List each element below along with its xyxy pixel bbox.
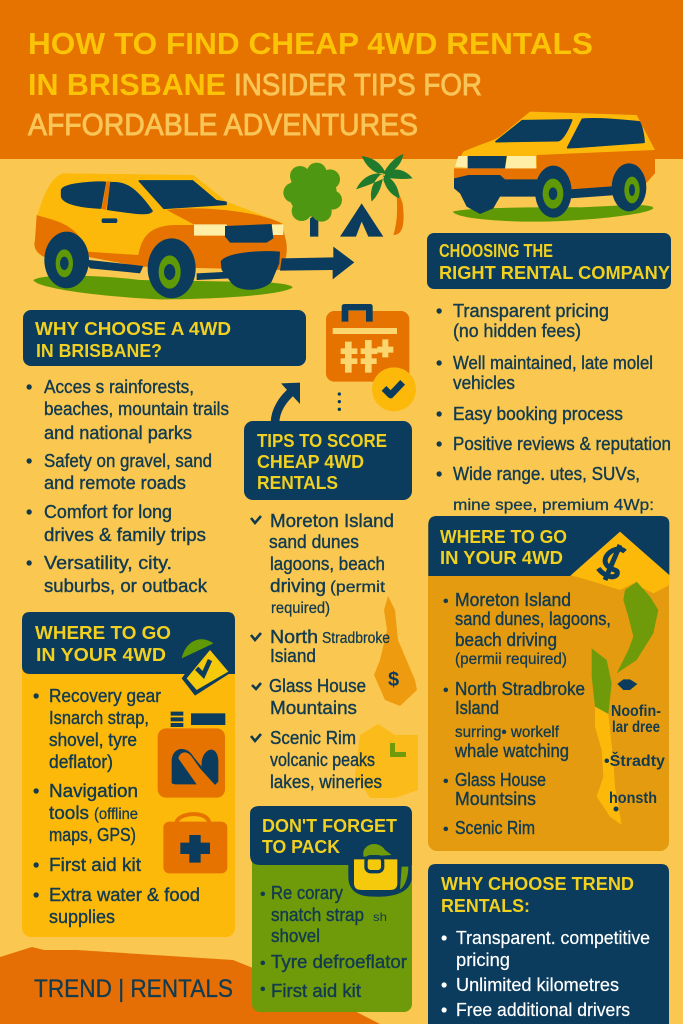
bullet list: whale watching <box>454 741 569 761</box>
arrow <box>280 247 354 279</box>
panel: choosing the right rental company <box>427 233 671 514</box>
bullet list: • <box>33 855 39 875</box>
bullet list: Isnarch strap, <box>49 708 149 728</box>
bullet list: Re corary <box>271 883 343 903</box>
windows <box>496 119 644 148</box>
green land north <box>617 582 658 673</box>
bullet list <box>441 928 650 1020</box>
bullet list: and remote roads <box>44 473 186 493</box>
bullet list: vehicles <box>453 373 515 393</box>
heading <box>35 623 171 665</box>
bullet list: • <box>33 781 39 801</box>
headlights <box>455 156 536 168</box>
bullet list: Transparent pricing <box>453 301 609 321</box>
icon: jerry can <box>158 712 225 798</box>
tree <box>283 163 342 237</box>
bullet list: • <box>260 981 266 998</box>
bullet list: Navigation <box>49 781 138 801</box>
map labels: Noofin- <box>611 703 661 720</box>
check list: Isiand <box>270 646 316 666</box>
tent <box>340 203 383 237</box>
heading box <box>22 612 235 674</box>
heading box <box>250 806 412 865</box>
bullet list: • <box>26 451 32 471</box>
heading: WHY CHOOSE A 4WD <box>35 319 231 339</box>
curved arrow <box>275 383 300 423</box>
bullet list: • <box>436 464 442 484</box>
car lower body <box>34 208 287 270</box>
grille <box>225 224 273 243</box>
car body <box>455 112 655 167</box>
heading <box>441 874 634 916</box>
bullet list: shovel, tyre <box>49 730 137 750</box>
heading <box>439 241 670 283</box>
bullet list: Unlimited kilometres <box>456 975 619 995</box>
illustration: top right 4WD <box>453 112 655 222</box>
title <box>28 26 593 142</box>
bullet list: • <box>260 886 266 903</box>
check list: driving <box>270 576 326 596</box>
bullet list: • <box>443 821 449 838</box>
illustration: 4WD with arrow and nature icons <box>33 154 416 423</box>
bullet list: Positive reviews & reputation <box>453 434 671 454</box>
heading: IN YOUR 4WD <box>440 548 563 568</box>
bullet list: beach driving <box>455 630 557 650</box>
map labels: lar dree <box>612 719 660 736</box>
heading <box>257 431 387 493</box>
panel: tips to score cheap 4WD rentals <box>244 421 418 798</box>
bullet list: North Stradbroke <box>455 679 585 699</box>
bullet list: deflator) <box>49 752 113 772</box>
front wheel <box>148 238 196 298</box>
check list: required) <box>271 600 330 617</box>
heading <box>262 816 397 857</box>
bullet list: • <box>441 928 447 948</box>
rear wheel <box>612 163 646 211</box>
bullet list: • <box>443 593 449 610</box>
panel: where to go, recovery gear <box>22 612 235 937</box>
bullet list: Moreton Island <box>455 590 571 610</box>
bullet list: (no hidden fees) <box>453 321 581 341</box>
check list: lagoons, beach <box>270 554 385 574</box>
bullet list: drives & family trips <box>44 525 206 545</box>
bullet list: snatch strap <box>271 905 364 925</box>
title: IN BRISBANE <box>28 67 226 102</box>
bullet list: • <box>436 353 442 373</box>
map labels: •Štradty <box>604 751 665 770</box>
check list: North <box>270 627 318 647</box>
bullet list: Tyre defroeflator <box>271 952 407 972</box>
panel: why choose Trend Rentals <box>428 864 669 1024</box>
bullet list: First aid kit <box>271 981 361 1001</box>
bullet list: Scenic Rim <box>455 818 535 838</box>
title: INSIDER TIPS FOR <box>234 67 482 102</box>
bullet list: shovel <box>271 926 320 946</box>
header band <box>0 0 683 159</box>
heading box <box>244 421 412 500</box>
panel background <box>22 612 235 937</box>
calendar icon <box>326 304 416 411</box>
heading: IN YOUR 4WD <box>36 645 166 665</box>
icon: bag <box>348 844 412 897</box>
map <box>428 516 669 825</box>
ground <box>453 205 653 222</box>
bullet list: Transparent. competitive <box>456 928 650 948</box>
bullet list: maps, GPS) <box>49 825 136 845</box>
heading: WHY CHOOSE TREND <box>441 874 634 894</box>
bullet list: sh <box>373 910 387 924</box>
heading: IN BRISBANE? <box>36 341 162 361</box>
palm tree <box>356 154 413 235</box>
headlights <box>194 224 283 236</box>
bullet list: Safety on gravel, sand <box>44 451 212 471</box>
bullet list <box>26 377 229 596</box>
bullet list: Comfort for long <box>44 502 172 522</box>
front wheel <box>535 166 572 218</box>
heading box <box>23 310 306 366</box>
bullet list: Island <box>455 698 499 718</box>
bullet list: and national parks <box>44 423 192 443</box>
bullet list: Acces s rainforests, <box>44 377 194 397</box>
bullet list: • <box>33 686 39 706</box>
bullet list: • <box>436 301 442 321</box>
bullet list: Wide range. utes, SUVs, <box>453 464 640 484</box>
windows <box>62 181 226 213</box>
check list: sand dunes <box>269 532 359 552</box>
bullet list: • <box>441 975 447 995</box>
island dot <box>617 679 637 690</box>
bullet list: Free additional drivers <box>456 1000 630 1020</box>
panel: don't forget to pack <box>250 806 412 1012</box>
bullet list: • <box>26 502 32 522</box>
heading: WHERE TO GO <box>440 527 567 547</box>
car body <box>37 173 283 263</box>
bullet list: Versatility, city. <box>44 553 172 573</box>
green land south <box>592 648 612 714</box>
bullet list: supplies <box>49 907 115 927</box>
bullet list: First aid kit <box>49 855 141 875</box>
heading: RIGHT RENTAL COMPANY <box>439 263 670 283</box>
ground <box>33 276 293 299</box>
check list: Moreton Island <box>270 511 394 531</box>
bullet list: suburbs, or outback <box>44 576 208 596</box>
check list: Scenic Rim <box>270 728 356 748</box>
check marks <box>251 516 261 741</box>
panel background <box>428 864 669 1024</box>
panel background <box>428 516 669 851</box>
door pillar <box>102 181 111 210</box>
bullet list: (offline <box>94 806 138 823</box>
heading: RENTALS: <box>441 896 530 916</box>
title: HOW TO FIND CHEAP 4WD RENTALS <box>28 26 593 61</box>
heading: TO PACK <box>262 837 340 857</box>
heading <box>440 527 567 568</box>
bullet list: • <box>436 404 442 424</box>
panel: where to go, destinations map <box>428 516 669 851</box>
bullet list: • <box>33 885 39 905</box>
bumper and sills <box>83 251 280 290</box>
panel: why choose a 4WD <box>23 310 306 596</box>
bullet list: Well maintained, late molel <box>453 353 653 373</box>
heading box <box>427 233 671 289</box>
check list: (permit <box>330 579 386 596</box>
yellow strip <box>595 707 622 825</box>
dollar sign: $ <box>388 669 399 691</box>
bullet list: Glass House <box>455 770 546 790</box>
bullet list: • <box>26 553 32 573</box>
bullet list: surring• workelf <box>455 724 560 741</box>
bullet list: • <box>26 377 32 397</box>
bullet list <box>260 883 407 1001</box>
heading: RENTALS <box>257 473 338 493</box>
logo: Trend Rentals: TREND | RENTALS <box>34 975 233 1003</box>
check list: lakes, wineries <box>270 772 382 792</box>
bullet list: • <box>436 434 442 454</box>
panel background <box>252 806 412 1012</box>
heading: CHEAP 4WD <box>257 452 364 472</box>
check list: Glass House <box>269 676 366 696</box>
bullet list: Extra water & food <box>49 885 200 905</box>
map marker <box>390 743 406 757</box>
map labels <box>604 703 665 807</box>
bullet list: (permii required) <box>455 651 567 668</box>
heading <box>35 319 231 361</box>
check list: volcanic peaks <box>270 750 375 770</box>
icon: first aid kit <box>163 814 227 873</box>
bullet list: • <box>443 682 449 699</box>
title: AFFORDABLE ADVENTURES <box>28 107 418 142</box>
footer hill <box>0 947 380 1024</box>
bullet list: • <box>441 1000 447 1020</box>
navy header <box>428 516 669 576</box>
yellow peak <box>570 532 669 593</box>
bullet list <box>436 301 671 514</box>
bullet list: mine spee, premium 4Wp: <box>453 497 654 514</box>
bullet list: Easy booking process <box>453 404 623 424</box>
car lower body <box>454 150 655 191</box>
bullet list: • <box>260 955 266 972</box>
bullet list: • <box>443 773 449 790</box>
bullet list: beaches, mountain trails <box>44 399 229 419</box>
dollar sign <box>598 545 625 580</box>
bullet list <box>443 590 611 838</box>
heading: WHERE TO GO <box>35 623 171 643</box>
heading: DON'T FORGET <box>262 816 397 836</box>
grille <box>468 156 507 168</box>
decorative map: island <box>374 596 417 706</box>
rear wheel <box>44 232 89 288</box>
icon: checklist tag <box>182 639 234 696</box>
bullet list: pricing <box>456 950 510 970</box>
check list: Mountains <box>270 698 357 718</box>
bullet list <box>33 686 200 927</box>
check list <box>269 511 394 792</box>
bullet list: Mountsins <box>455 789 536 809</box>
heading: CHOOSING THE <box>439 241 553 261</box>
map labels: honsth <box>609 790 657 807</box>
heading: TIPS TO SCORE <box>257 431 387 451</box>
decorative map: blob <box>355 724 418 798</box>
bumper and sill <box>454 175 617 214</box>
door handle <box>102 218 117 223</box>
bullet list: Recovery gear <box>49 686 161 706</box>
bullet list: sand dunes, lagoons, <box>455 609 611 629</box>
map marker <box>614 806 618 812</box>
check list: Stradbroke <box>322 630 390 647</box>
bullet list: tools <box>49 803 89 823</box>
